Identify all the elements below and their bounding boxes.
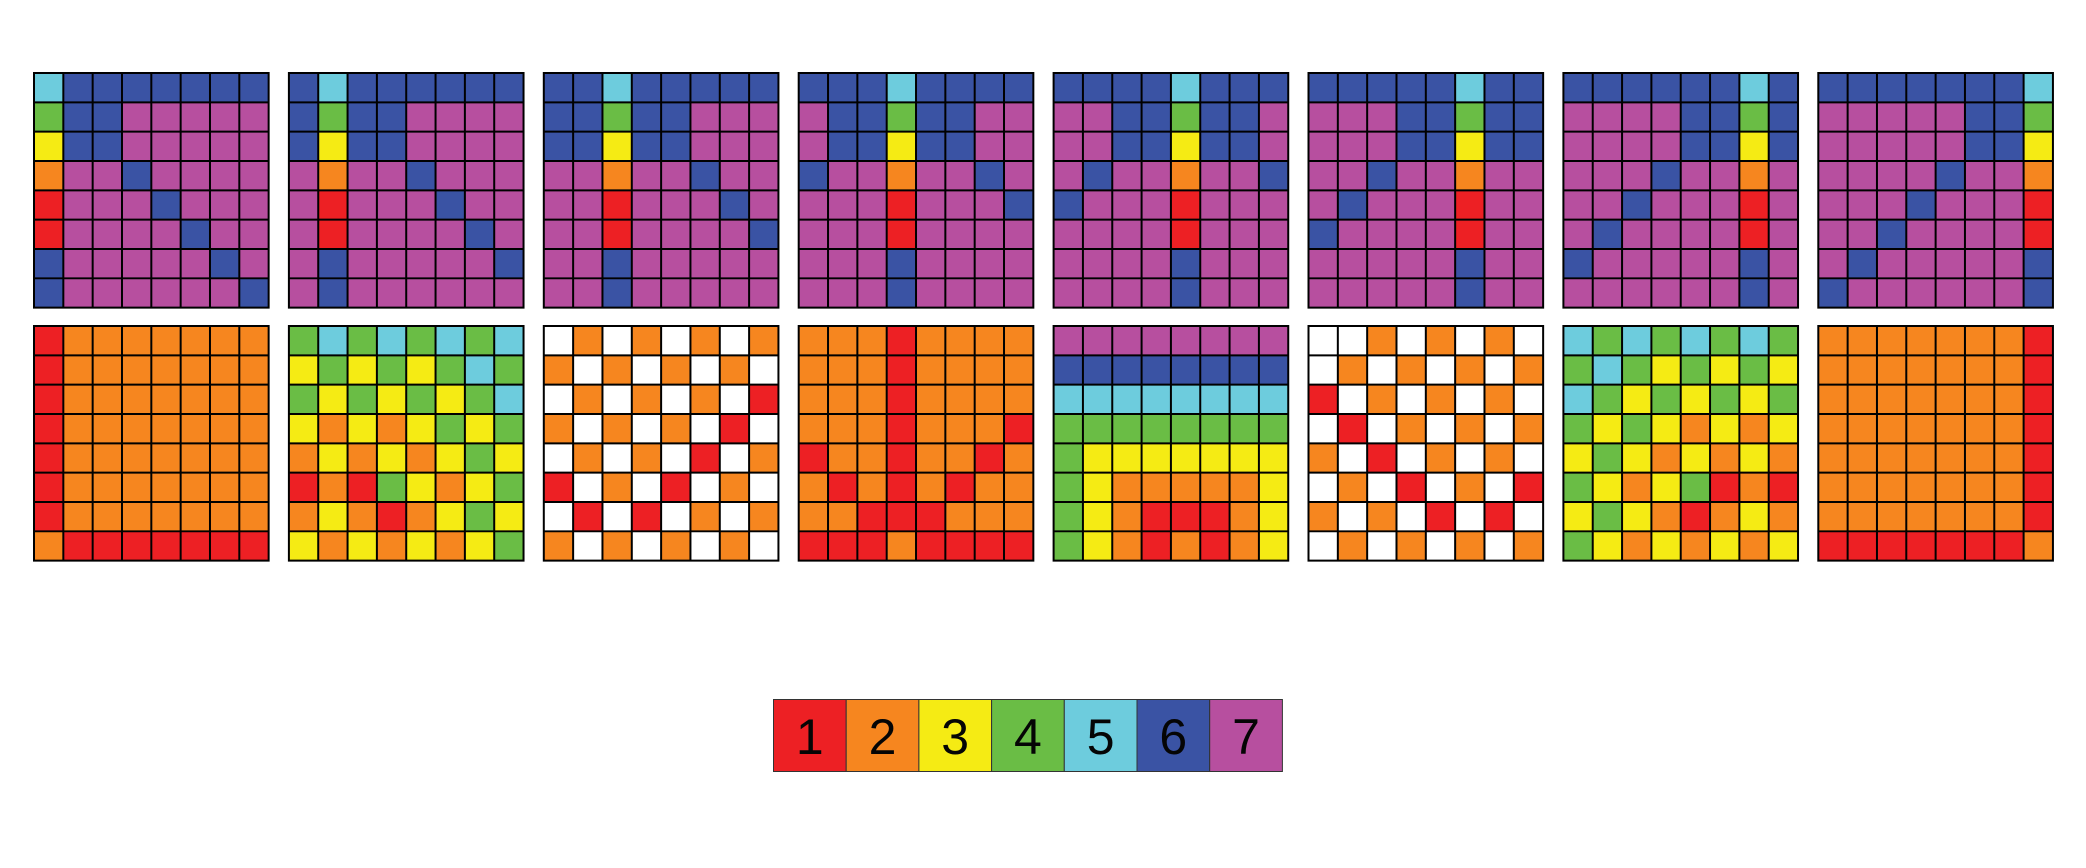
legend swatch 5 cyan: 5 (1087, 709, 1115, 765)
grid: bottom 2 (289, 326, 524, 561)
grid: bottom 1 (34, 326, 269, 561)
legend swatch 5 cyan (1064, 700, 1137, 772)
grid: top 1 (34, 73, 269, 308)
legend swatch 6 blue: 6 (1159, 709, 1187, 765)
grid: bottom 5 (1054, 326, 1288, 561)
grid: top 5 (1054, 73, 1288, 308)
legend swatch 4 green: 4 (1014, 709, 1042, 765)
legend swatch 7 purple: 7 (1232, 709, 1260, 765)
grid: top 6 (1308, 73, 1543, 308)
legend swatch 3 yellow (919, 700, 992, 772)
legend swatch 2 orange (846, 700, 919, 772)
panel: top row of grids (34, 73, 2053, 308)
legend swatch 1 red: 1 (796, 709, 824, 765)
legend swatch 1 red (774, 700, 846, 772)
grid: bottom 4 (799, 326, 1033, 561)
legend swatch 7 purple (1210, 700, 1282, 772)
grid: top 7 (1563, 73, 1798, 308)
legend swatch 2 orange: 2 (869, 709, 896, 765)
legend swatch 3 yellow: 3 (941, 709, 969, 765)
grid: bottom 8 (1818, 326, 2053, 561)
grid: top 3 (544, 73, 778, 308)
grid: top 2 (289, 73, 524, 308)
legend swatch 6 blue (1137, 700, 1210, 772)
panel: bottom row of grids (34, 326, 2053, 561)
grid: top 4 (799, 73, 1033, 308)
legend swatch 4 green (992, 700, 1064, 772)
grid: bottom 6 (1308, 326, 1543, 561)
grid: bottom 7 (1563, 326, 1798, 561)
legend: colour key 1 to 7 (774, 700, 1282, 772)
grid: top 8 (1818, 73, 2053, 308)
grid: bottom 3 (544, 326, 778, 561)
